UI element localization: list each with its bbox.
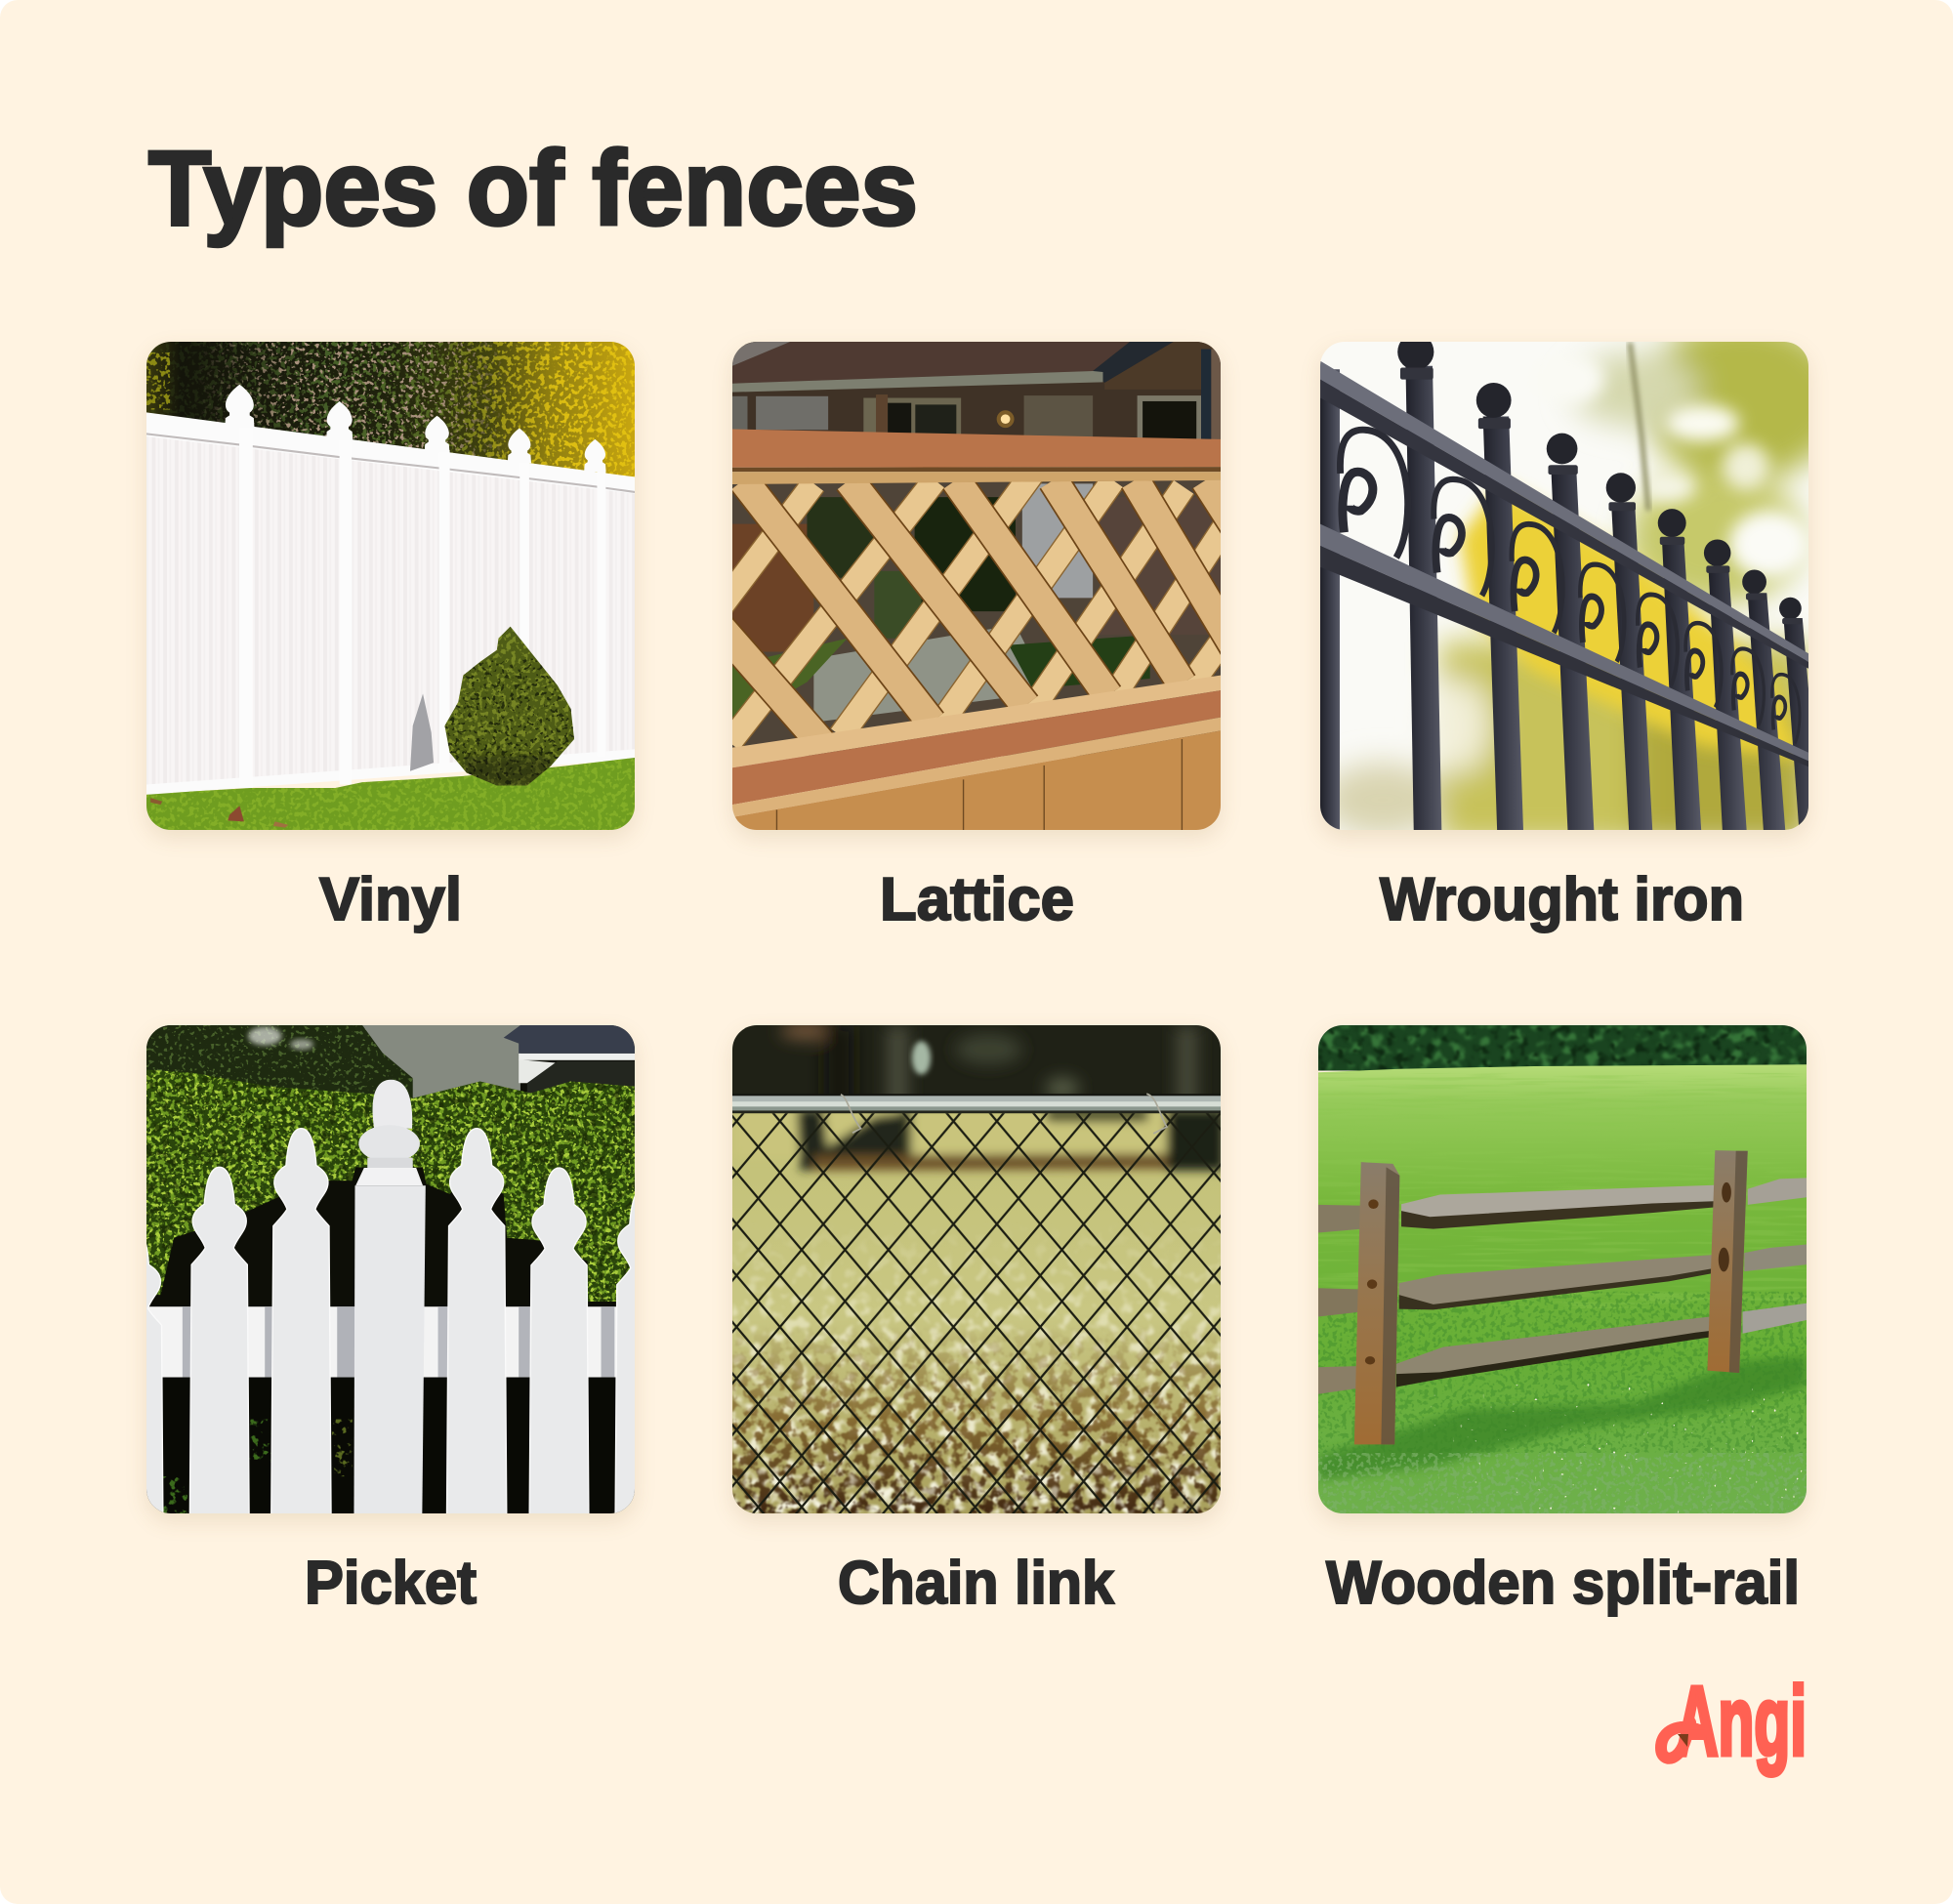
label: Picket: Picket [305, 1550, 477, 1617]
background house and trees [146, 1025, 635, 1307]
photo: lattice fence [732, 342, 1221, 830]
long rails [1396, 1184, 1727, 1387]
label: Vinyl: Vinyl [319, 866, 462, 933]
gap below rail [146, 1378, 635, 1513]
logo: Angi [1655, 1667, 1807, 1778]
shrub [445, 627, 574, 785]
white vinyl panels [146, 412, 635, 795]
chain link mesh [732, 1113, 1221, 1513]
post caps [225, 385, 606, 472]
blurred lawn [732, 1110, 1224, 1513]
upper rail [1320, 361, 1808, 669]
view through lattice [732, 480, 1221, 756]
top rail [732, 430, 1221, 484]
scroll work [1340, 430, 1800, 743]
lawn [146, 756, 635, 830]
lawn [1318, 1064, 1807, 1513]
logo: Angi: Angi [1676, 1667, 1807, 1776]
cast shadow [410, 694, 434, 771]
title: Types of fences [148, 129, 918, 248]
photo: wrought iron fence [1320, 342, 1808, 830]
pickets [104, 1129, 675, 1665]
ball finials [1397, 334, 1802, 624]
photo: vinyl fence [146, 342, 635, 830]
label: Wooden split-rail: Wooden split-rail [1326, 1550, 1800, 1617]
label: Chain link: Chain link [838, 1550, 1114, 1617]
photo: chain link fence [732, 1025, 1221, 1513]
house [732, 342, 1221, 442]
foliage background [146, 342, 635, 503]
blurred background trees [732, 1022, 1221, 1116]
lattice strips [732, 480, 1221, 748]
lower rail [1320, 524, 1808, 766]
fence posts [1354, 1150, 1748, 1444]
center post with acorn finial [353, 1080, 426, 1513]
cross rail [146, 1306, 635, 1378]
picket bars [1320, 366, 1820, 830]
photo: picket fence [146, 1025, 635, 1513]
hedge [146, 1066, 635, 1308]
treeline [1318, 1025, 1807, 1070]
rear and side rail stubs [1318, 1178, 1807, 1394]
top rail pipe [732, 1094, 1221, 1134]
photo: wooden split-rail fence [1318, 1025, 1807, 1513]
label: Wrought iron: Wrought iron [1380, 866, 1744, 933]
bottom rail and boards [732, 676, 1221, 830]
label: Lattice: Lattice [880, 866, 1074, 933]
blurred garden background [1320, 319, 1844, 844]
